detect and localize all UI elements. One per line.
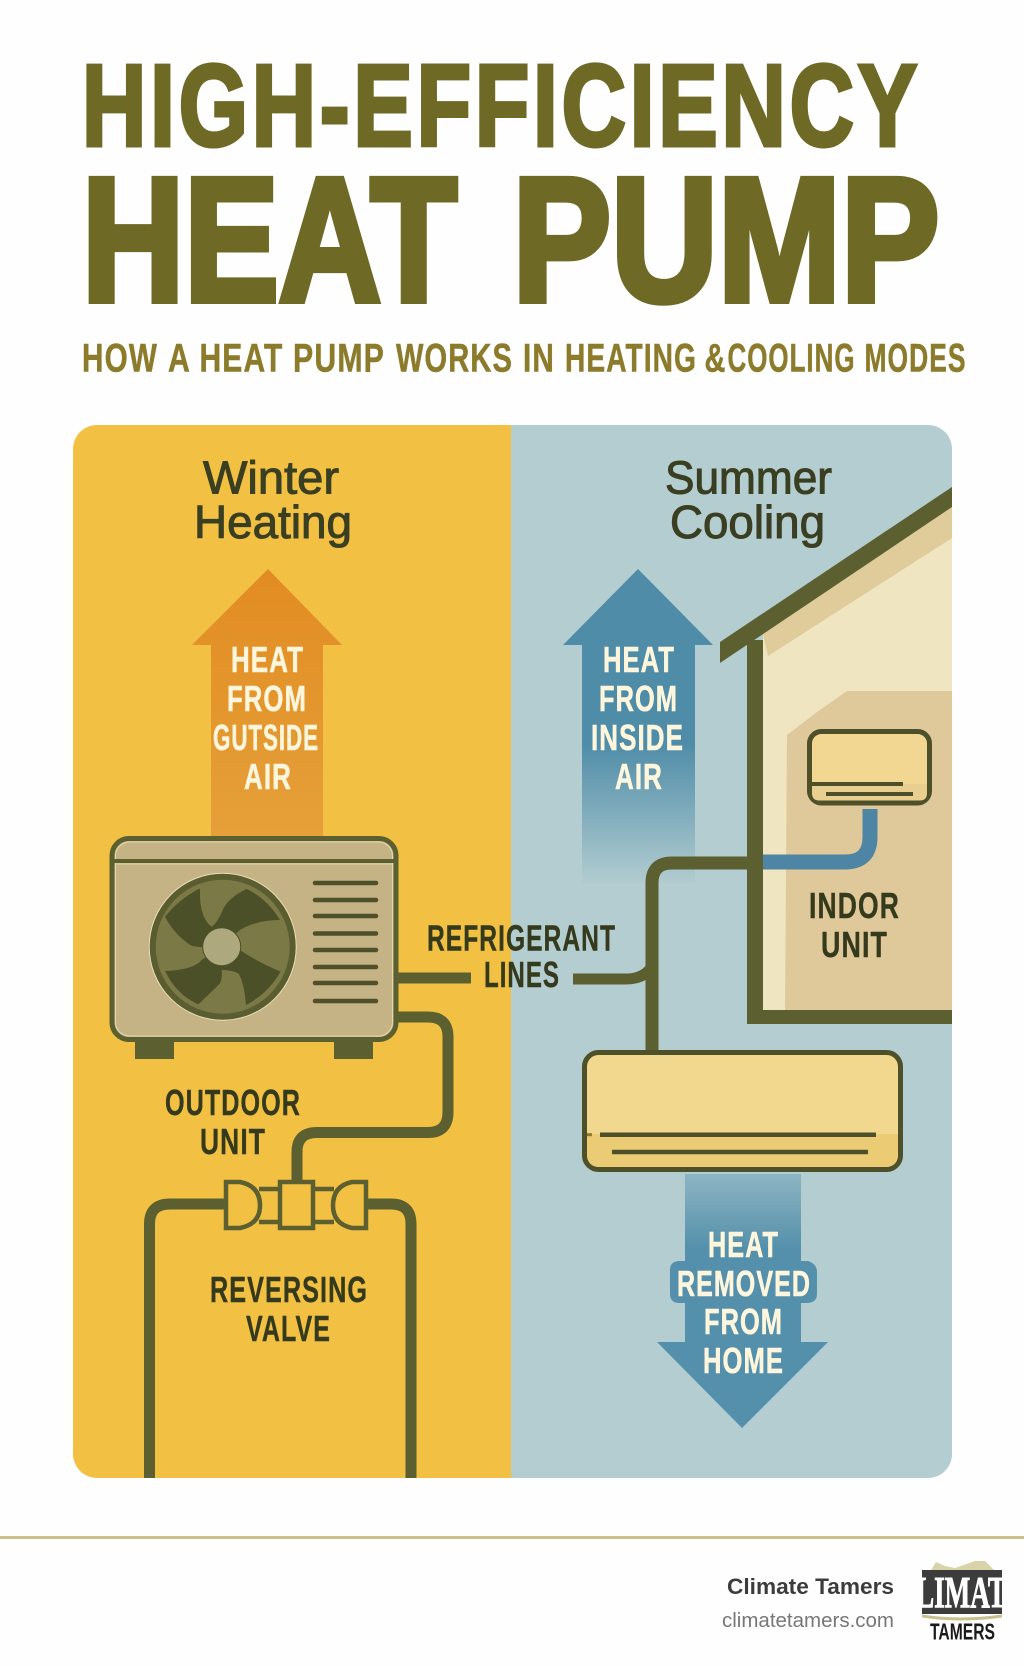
house cutaway (720, 487, 952, 1024)
footer url: climatetamers.com (722, 1609, 894, 1632)
label: outdoor unit: UNIT (200, 1121, 266, 1162)
panel: winter side (73, 425, 511, 1478)
arrow: heat from outside air: AIR (244, 756, 292, 797)
label: outdoor unit (166, 1089, 300, 1154)
logo: TAMERS (930, 1618, 995, 1644)
subtitle: WORKS (396, 336, 513, 380)
outdoor unit (112, 838, 396, 1059)
panel: comparison diagram (73, 425, 952, 1480)
panel: summer side (511, 425, 952, 1478)
unit feet (135, 1042, 373, 1059)
arrow: heat from outside air: FROM (227, 678, 307, 719)
label: refrigerant lines (428, 924, 615, 988)
label: refrigerant lines: LINES (484, 954, 560, 995)
arrow: heat removed from home: FROM (704, 1301, 783, 1342)
arrow: heat from outside air: HEAT (231, 639, 304, 680)
heading: winter heating (197, 460, 350, 548)
main indoor air handler (584, 1052, 900, 1170)
heading: summer cooling: Summer (665, 452, 832, 504)
logo (922, 1561, 1002, 1640)
label: reversing valve: REVERSING (210, 1269, 368, 1310)
arrow: heat removed from home: HOME (703, 1340, 784, 1381)
subtitle: PUMP (293, 336, 385, 380)
label: refrigerant lines: REFRIGERANT (427, 918, 616, 958)
arrow: heat removed from home: HEAT (708, 1224, 779, 1265)
arrow: heat from inside air (563, 569, 713, 885)
arrow: heat removed from home (657, 1174, 828, 1428)
label: indoor unit: UNIT (821, 924, 888, 965)
refrigerant lines (olive) (150, 863, 748, 1480)
subtitle: MODES (864, 336, 966, 380)
subtitle: HOW (82, 336, 158, 380)
icon: fan (149, 873, 296, 1020)
heading: summer cooling (666, 460, 832, 548)
heading: summer cooling: Cooling (670, 496, 825, 548)
arrow: heat from inside air: INSIDE (591, 717, 684, 758)
arrow: heat from inside air: FROM (599, 678, 678, 719)
footer brand name: Climate Tamers (727, 1574, 894, 1599)
subtitle: HEATING (565, 336, 697, 380)
unit louvers (315, 883, 376, 1001)
arrow: heat from outside air: GUTSIDE (213, 717, 319, 758)
label: indoor unit: INDOR (809, 885, 900, 926)
label: outdoor unit: OUTDOOR (165, 1082, 301, 1123)
label: reversing valve: VALVE (246, 1308, 331, 1349)
heading: winter heating: Heating (194, 496, 352, 548)
subtitle: & (704, 336, 726, 380)
icon: reversing valve (226, 1182, 366, 1228)
unit casing (112, 838, 396, 1040)
arrow: heat from inside air: AIR (615, 756, 663, 797)
subtitle: HEAT (200, 336, 284, 380)
arrow: heat from inside air: HEAT (603, 639, 675, 680)
subtitle: A (168, 336, 191, 380)
label: reversing valve (212, 1276, 366, 1342)
subtitle (82, 336, 966, 380)
title line 2: HEAT (82, 142, 457, 338)
title line 2 (82, 142, 940, 338)
title line 2: PUMP (512, 142, 940, 338)
subtitle: IN (523, 336, 555, 380)
arrow: heat removed from home: REMOVED (677, 1263, 811, 1304)
label: indoor unit (810, 892, 899, 958)
subtitle: COOLING (728, 336, 856, 380)
arrow: heat from outside air (192, 569, 342, 840)
refrigerant line to indoor unit (blue) (763, 809, 870, 862)
footer rule (0, 1536, 1024, 1539)
heading: winter heating: Winter (203, 452, 339, 504)
indoor wall unit (810, 732, 930, 803)
